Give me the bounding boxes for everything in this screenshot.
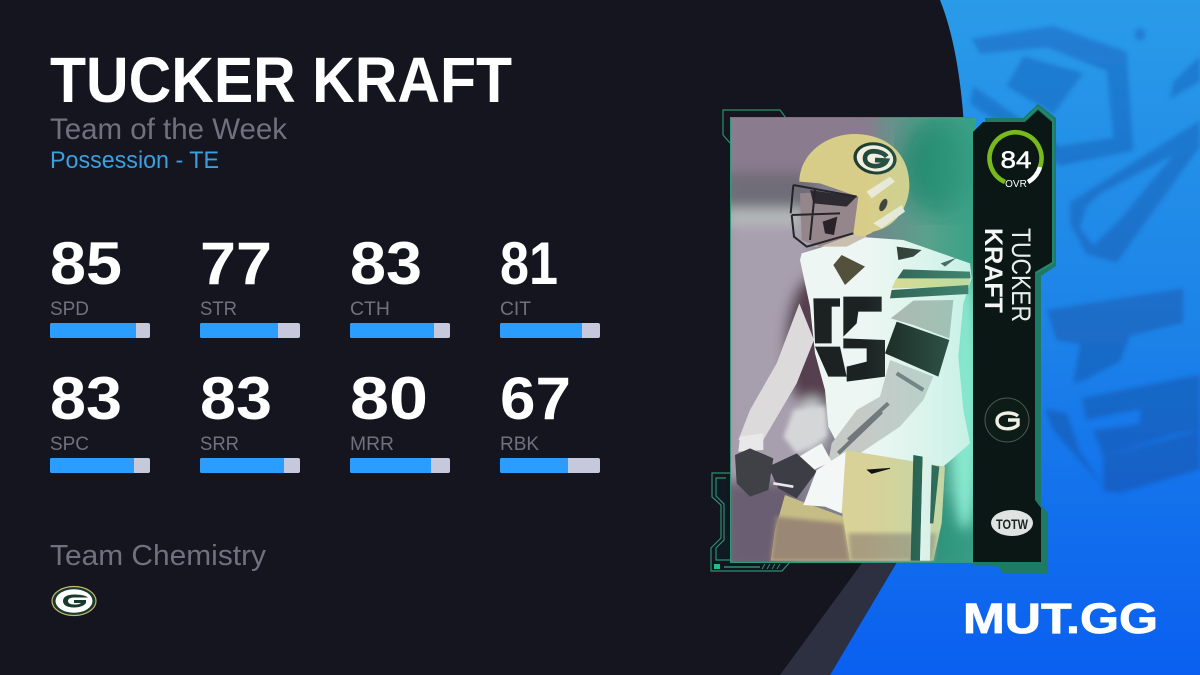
- icon: TOTW badge: TOTW: [996, 516, 1029, 532]
- jersey numbers: [813, 297, 885, 382]
- curved band: [780, 548, 905, 675]
- rating ring: [990, 132, 1042, 190]
- stat: SPD: 85: [50, 230, 122, 297]
- player card: [711, 104, 1056, 580]
- stat: MRR: 80: [350, 365, 428, 432]
- chin: [813, 230, 867, 247]
- teal glow: [902, 115, 978, 215]
- stat: MRR: [350, 365, 450, 473]
- left arm: [738, 303, 814, 440]
- player name vertical: [979, 228, 1036, 322]
- sleeve stripes: [895, 269, 971, 282]
- wrist tape: [799, 443, 832, 472]
- title: TUCKER KRAFT: [50, 44, 512, 116]
- stat: RBK: 67: [500, 365, 571, 432]
- stat: SPD: SPD: [50, 299, 89, 320]
- stat: CTH: 83: [350, 230, 422, 297]
- face: [800, 190, 860, 247]
- sidebar: [973, 104, 1056, 573]
- stat: STR: 77: [200, 230, 272, 297]
- icon: TOTW badge: [991, 510, 1033, 536]
- collar: [833, 255, 865, 285]
- stat: SPC: [50, 365, 150, 473]
- stat: SPC: SPC: [50, 434, 89, 455]
- player name vertical: KRAFT: [979, 228, 1007, 313]
- helmet: [799, 134, 909, 236]
- ghost player art: [970, 26, 1200, 493]
- stat: MRR: MRR: [350, 434, 394, 455]
- tattooed forearm: [828, 360, 933, 462]
- icon: packers logo: [52, 586, 96, 616]
- jersey: [800, 237, 972, 467]
- left thigh: [771, 495, 850, 561]
- stat: CIT: [500, 230, 600, 338]
- stat: STR: STR: [200, 299, 237, 320]
- icon: team badge: [985, 398, 1029, 442]
- pants: [842, 450, 945, 561]
- stat: SPC: 83: [50, 365, 122, 432]
- player name vertical: TUCKER: [1006, 228, 1036, 322]
- stat: CIT: CIT: [500, 299, 531, 320]
- position label: Possession - TE: [50, 147, 219, 174]
- card frame: bottom-left corner: [711, 473, 790, 571]
- stat: SRR: SRR: [200, 434, 239, 455]
- stat: CTH: [350, 230, 450, 338]
- rating ring: 84: [1000, 147, 1032, 174]
- card frame: top-left corner: [723, 110, 786, 143]
- stat: SPD: [50, 230, 150, 338]
- stat: RBK: RBK: [500, 434, 539, 455]
- face mask: [791, 185, 857, 247]
- photo border: [730, 118, 973, 562]
- blue panel: [830, 0, 1200, 675]
- armband: [885, 322, 949, 377]
- shoulder number: [897, 247, 922, 260]
- team chemistry heading: Team Chemistry: [50, 540, 267, 572]
- swoosh: [941, 258, 957, 267]
- gloves: [735, 448, 773, 497]
- stat: CTH: CTH: [350, 299, 390, 320]
- tattooed upper arm: [891, 300, 953, 338]
- player photo: [731, 118, 976, 562]
- stat: CIT: 81: [500, 230, 558, 297]
- stat: SRR: [200, 365, 300, 473]
- blurred backdrop: [725, 115, 875, 570]
- subtitle: Team of the Week: [50, 113, 288, 146]
- logo: MUT.GG: MUT.GG: [963, 595, 1158, 643]
- towel: [803, 452, 846, 513]
- stat: SRR: 83: [200, 365, 272, 432]
- stat: STR: [200, 230, 300, 338]
- rating ring: OVR: [1005, 179, 1027, 190]
- stat: RBK: [500, 365, 600, 473]
